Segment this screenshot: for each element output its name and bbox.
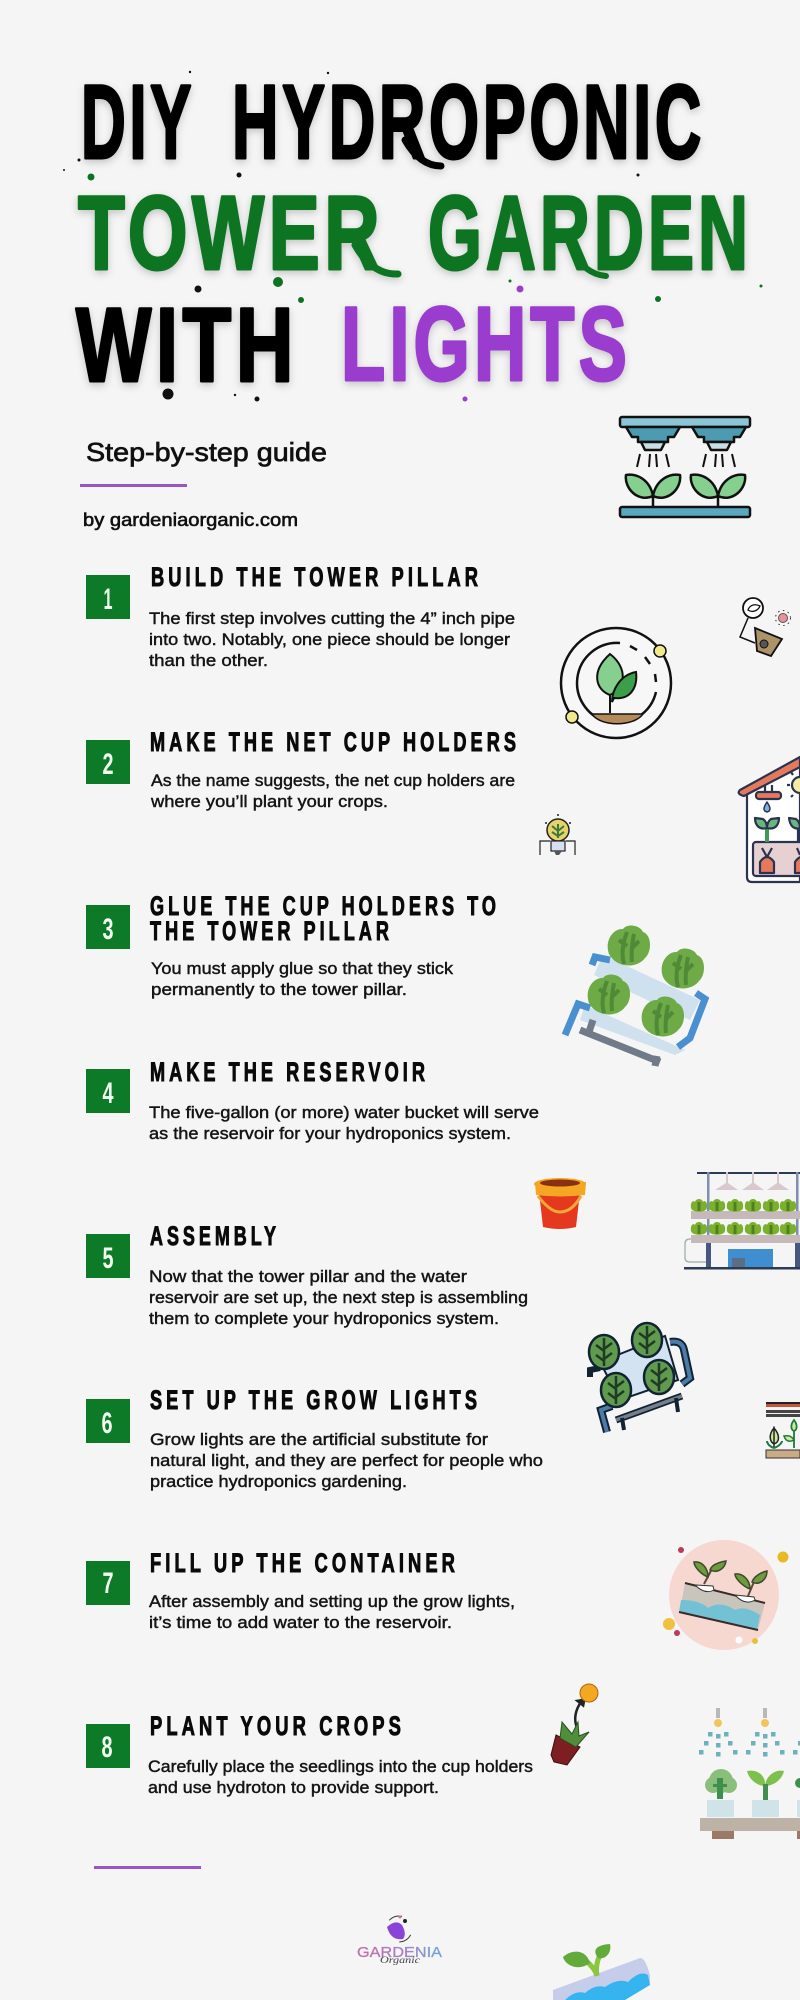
step text [149,1267,528,1328]
step number: 5 [102,1242,114,1275]
step heading: BUILD THE TOWER PILLAR [151,562,482,592]
step number [86,740,130,784]
step text: You must apply glue so that they stick [151,959,454,978]
logo: GARDENIA [357,1944,442,1961]
step text: permanently to the tower pillar. [151,980,407,999]
step text: reservoir are set up, the next step is assembling [149,1288,528,1307]
title [76,64,752,404]
step text: natural light, and they are perfect for people who [150,1451,543,1470]
step number [86,575,130,619]
step heading [150,891,500,946]
step heading: FILL UP THE CONTAINER [150,1548,459,1578]
icon: potted seedling with sun [740,598,790,656]
step number: 3 [102,913,114,946]
logo [357,1916,442,1965]
icon: seedling in water tray [553,1944,650,2000]
panel: step 1 [86,562,515,670]
icon: sprinklers over plants [620,417,750,517]
subtitle: Step-by-step guide [86,437,327,467]
step text [149,1103,539,1143]
icon: plant in orbit circle [561,628,671,738]
step number [86,1234,130,1278]
icon: sprinklers and seedling table [699,1708,800,1839]
step heading: MAKE THE RESERVOIR [150,1057,429,1087]
paint splatter [63,71,762,402]
step text: After assembly and setting up the grow lights, [149,1592,515,1611]
icon: potted plant with bulb [551,1684,598,1765]
step number: 6 [102,1407,112,1440]
step text: as the reservoir for your hydroponics system. [149,1124,511,1143]
panel: step 2 [86,727,520,811]
step number: 7 [102,1567,114,1600]
step heading: ASSEMBLY [150,1221,280,1251]
step text [149,1592,515,1632]
title: TOWER [78,175,384,292]
icon: greenhouse [739,757,800,882]
title: WITH [76,287,298,404]
title: DIY [81,64,195,181]
icon: lettuce channels [565,925,705,1066]
icon: red bucket [534,1178,586,1229]
step heading: THE TOWER PILLAR [150,916,393,946]
step number [86,1069,130,1113]
step text: where you’ll plant your crops. [150,792,388,811]
subtitle rule [80,484,187,487]
step number: 4 [102,1077,114,1110]
step text [151,959,454,999]
step number [86,905,130,949]
step heading: PLANT YOUR CROPS [150,1711,405,1741]
step text: As the name suggests, the net cup holders are [151,771,515,790]
step text [150,771,515,811]
step heading: SET UP THE GROW LIGHTS [150,1385,481,1415]
icon: bulb with leaf [540,814,575,855]
step number: 8 [102,1731,112,1764]
step text: Now that the tower pillar and the water [149,1267,467,1286]
step number [86,1561,130,1605]
panel: step 7 [86,1548,515,1632]
panel: step 8 [86,1711,533,1797]
step number [86,1724,130,1768]
step text: than the other. [149,651,268,670]
step text: practice hydroponics gardening. [150,1472,407,1491]
panel: step 3 [86,891,500,999]
step heading: GLUE THE CUP HOLDERS TO [150,891,500,921]
step number [86,1399,130,1443]
step text: The first step involves cutting the 4” inch pipe [149,609,515,628]
step text: it’s time to add water to the reservoir. [149,1613,452,1632]
step text: Carefully place the seedlings into the cup holders [148,1757,533,1776]
icon: hydroponic rack [684,1172,800,1270]
panel: step 5 [86,1221,528,1328]
footer rule [94,1866,201,1869]
step text [150,1430,543,1491]
panel: step 6 [86,1385,543,1491]
step text: and use hydroton to provide support. [148,1778,439,1797]
panel: step 4 [86,1057,539,1143]
step text: them to complete your hydroponics system. [149,1309,499,1328]
step text [148,1757,533,1797]
logo: Organic [380,1955,420,1965]
icon: lettuce hydroponic bed [589,1323,690,1432]
byline: by gardeniaorganic.com [83,510,298,530]
step text: The five-gallon (or more) water bucket will serve [149,1103,539,1122]
icon: small grow light planter [766,1402,800,1458]
step text: Grow lights are the artificial substitute for [150,1430,488,1449]
icon: seedlings in water circle [663,1540,788,1650]
step heading: MAKE THE NET CUP HOLDERS [150,727,520,757]
step number: 2 [102,748,114,781]
step number: 1 [104,583,112,616]
step text: into two. Notably, one piece should be longer [149,630,510,649]
title: LIGHTS [341,286,631,403]
step text [149,609,515,670]
